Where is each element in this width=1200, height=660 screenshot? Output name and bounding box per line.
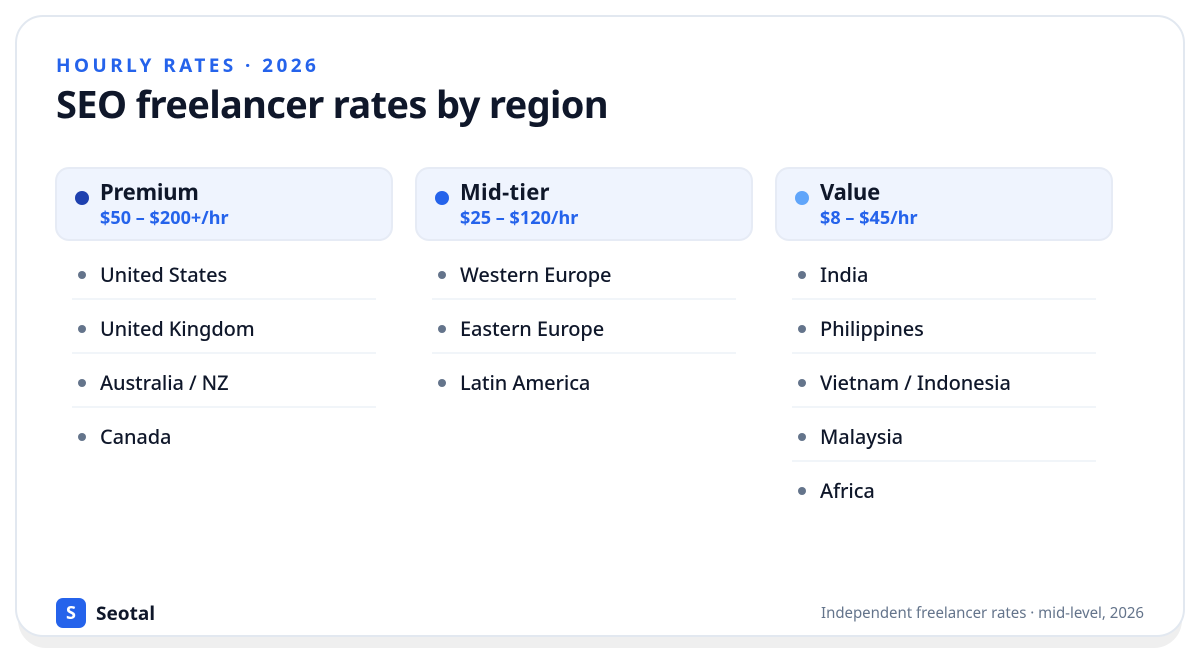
mid-tier item [432, 300, 736, 354]
value header [775, 167, 1113, 241]
mid-tier item [432, 246, 736, 300]
panel: mid-tier [415, 167, 753, 396]
value item: Philippines [820, 315, 924, 342]
mid-tier item: Eastern Europe [460, 315, 604, 342]
panel: premium [55, 167, 393, 450]
mid-tier dot [435, 191, 449, 205]
mid-tier header [415, 167, 753, 241]
value item: Malaysia [820, 423, 903, 450]
mid-tier name: Mid-tier [460, 177, 550, 207]
premium item: United Kingdom [100, 315, 255, 342]
panel: value [775, 167, 1113, 504]
premium item: Australia / NZ [100, 369, 228, 396]
value item: Vietnam / Indonesia [820, 369, 1011, 396]
mid-tier rate: $25 – $120/hr [460, 206, 578, 230]
value name: Value [820, 177, 880, 207]
premium item: United States [100, 261, 227, 288]
mid-tier item: Latin America [460, 369, 590, 396]
premium rate: $50 – $200+/hr [100, 206, 229, 230]
logo wordmark: Seotal [96, 600, 155, 626]
logo icon [56, 598, 86, 628]
value item: India [820, 261, 868, 288]
value item: Africa [820, 477, 875, 504]
premium item: Canada [100, 423, 171, 450]
title: SEO freelancer rates by region [56, 78, 608, 130]
footer note: Independent freelancer rates · mid-level, 2026 [821, 603, 1144, 623]
value item [792, 246, 1096, 300]
logo icon: S [66, 601, 76, 625]
premium item [72, 300, 376, 354]
value item [792, 408, 1096, 462]
premium dot [75, 191, 89, 205]
premium item [72, 246, 376, 300]
value dot [795, 191, 809, 205]
value item [792, 354, 1096, 408]
premium item [72, 354, 376, 408]
value item [792, 300, 1096, 354]
premium header [55, 167, 393, 241]
premium name: Premium [100, 177, 199, 207]
value rate: $8 – $45/hr [820, 206, 918, 230]
eyebrow: HOURLY RATES · 2026 [56, 52, 319, 78]
mid-tier item: Western Europe [460, 261, 611, 288]
